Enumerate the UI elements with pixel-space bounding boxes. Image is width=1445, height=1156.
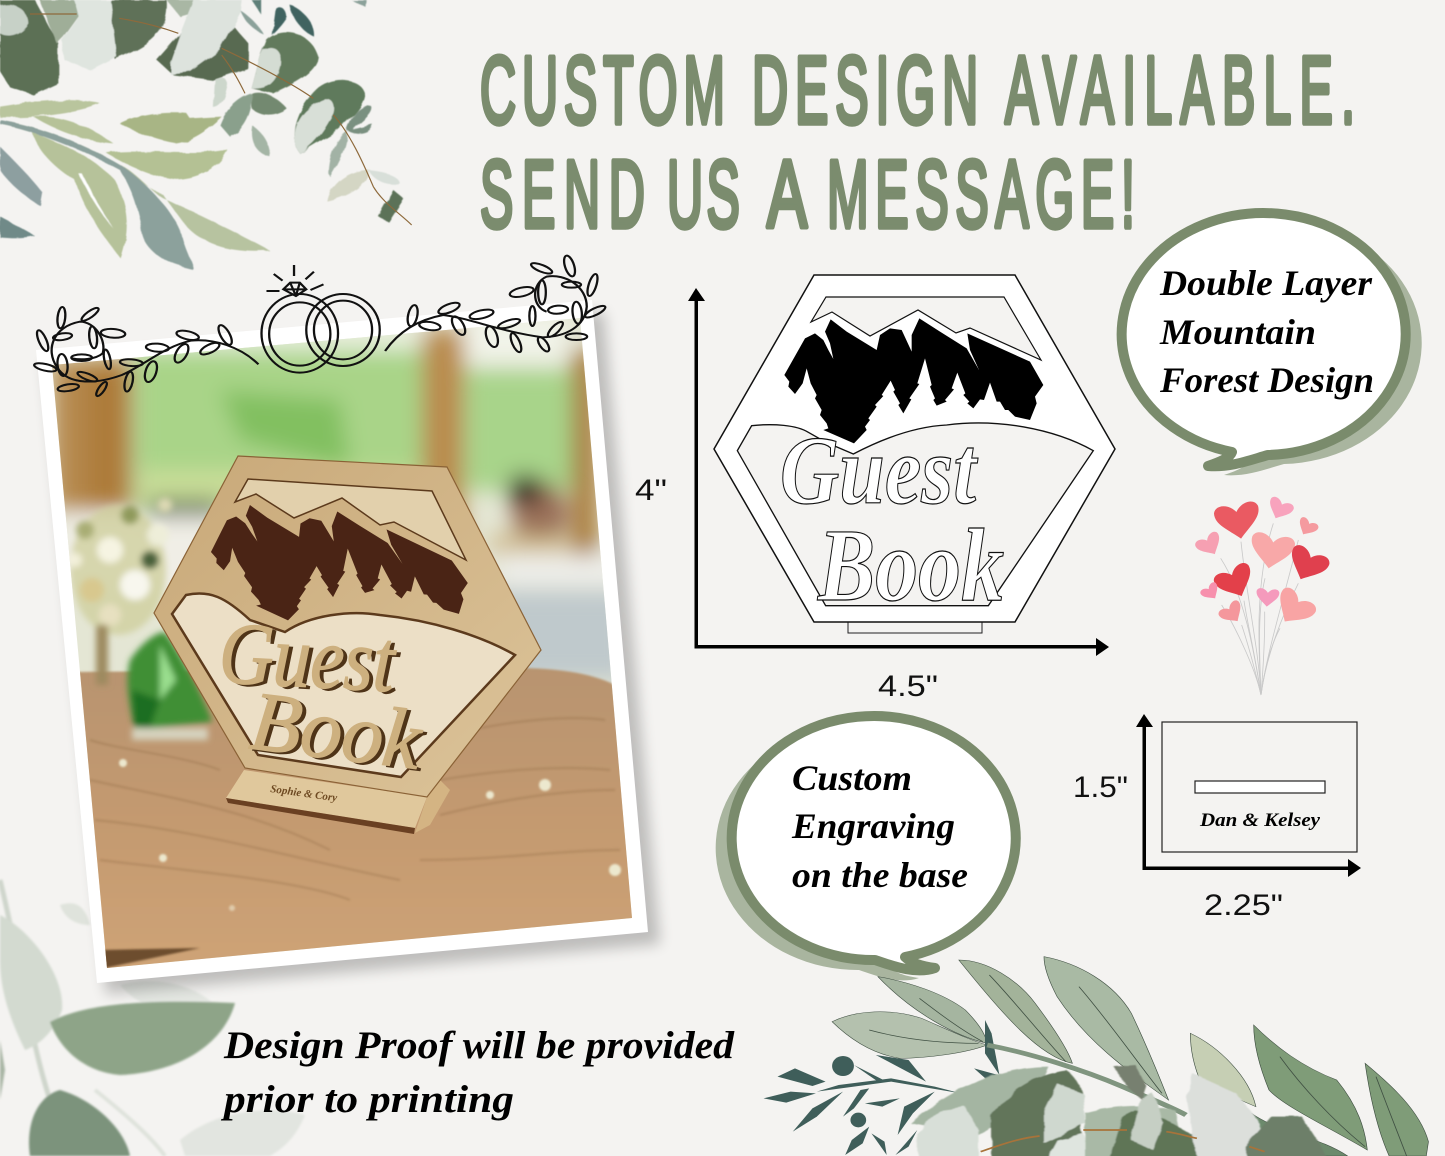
design proof note: prior to printing (221, 1078, 514, 1121)
lower window (172, 593, 515, 777)
bubble text: Mountain (1159, 312, 1316, 352)
guest book lettering: Sophie & Cory (270, 783, 338, 804)
blurred flowers and vase (68, 498, 212, 740)
speech bubble: custom engraving (716, 716, 1016, 980)
balloon strings (1221, 523, 1298, 695)
guest book lettering: Guest (221, 607, 403, 713)
dimension label: 2.25 inch: 2.25" (1204, 889, 1283, 922)
photo: guest book on wooden table (40, 310, 650, 980)
top-left foliage (0, 0, 412, 269)
guest book outline text (780, 417, 1004, 623)
eucalyptus cluster (911, 1065, 1328, 1156)
line drawing: base with engraving: Dan & Kelsey (1199, 810, 1321, 831)
wreath, rings and vines line art (33, 255, 607, 397)
design proof note: Design Proof will be provided (223, 1024, 735, 1067)
title (480, 38, 1355, 248)
sage leaves (832, 957, 1428, 1156)
title: DESIGN (752, 38, 978, 144)
dimension label: 4 inch: 4" (635, 474, 667, 507)
guest book lettering (217, 605, 431, 804)
bottom-right foliage (763, 957, 1428, 1156)
guest book outline text: Guest (780, 417, 978, 525)
branch (987, 1045, 1186, 1115)
wooden tabletop (70, 668, 640, 980)
guest book lettering: Guest (217, 605, 399, 711)
dimension axes (688, 288, 1109, 656)
bubble text: Engraving (791, 806, 955, 846)
bubble text: Double Layer (1159, 263, 1373, 303)
bottom-left foliage (0, 880, 305, 1156)
wedding rings (262, 265, 380, 373)
wooden guest book sign in photo (154, 456, 541, 834)
guest book lettering: Book (246, 675, 427, 788)
lower window (737, 423, 1093, 606)
dimension label: 1.5 inch: 1.5" (1073, 771, 1128, 804)
engraved mountains and trees (204, 500, 475, 636)
wood grain (90, 718, 620, 900)
title: MESSAGE! (827, 142, 1135, 248)
title: US (667, 142, 740, 248)
dark sprig (763, 1020, 999, 1155)
base axes (1136, 714, 1361, 877)
mountain silhouette (784, 318, 1043, 443)
bubble text: Forest Design (1159, 360, 1374, 400)
line drawing: sign with 4 by 4.5 inch dimensions (688, 275, 1115, 656)
title: CUSTOM (480, 38, 725, 144)
line drawing: base with engraving (1136, 714, 1361, 877)
left vine (33, 306, 258, 397)
eucalyptus cluster (0, 0, 412, 225)
guest book lettering: Book (250, 677, 431, 790)
bubble text (1159, 263, 1374, 400)
right vine (385, 255, 607, 353)
dimension label: 4.5 inch: 4.5" (878, 670, 938, 703)
speech bubble: double layer design (1122, 213, 1422, 475)
title: SEND (480, 142, 645, 248)
bubble text: on the base (792, 855, 968, 895)
photo card with shadow (36, 300, 660, 994)
eucalyptus stems (30, 14, 412, 225)
title: AVAILABLE. (1005, 38, 1355, 144)
olive and grey-green leaves (0, 100, 270, 269)
guest book outline text: Book (817, 508, 1004, 623)
bubble text (791, 758, 968, 895)
heart balloons (1194, 495, 1332, 695)
bubble text: Custom (792, 758, 912, 798)
design proof note (221, 1024, 735, 1121)
title: A (767, 142, 807, 248)
